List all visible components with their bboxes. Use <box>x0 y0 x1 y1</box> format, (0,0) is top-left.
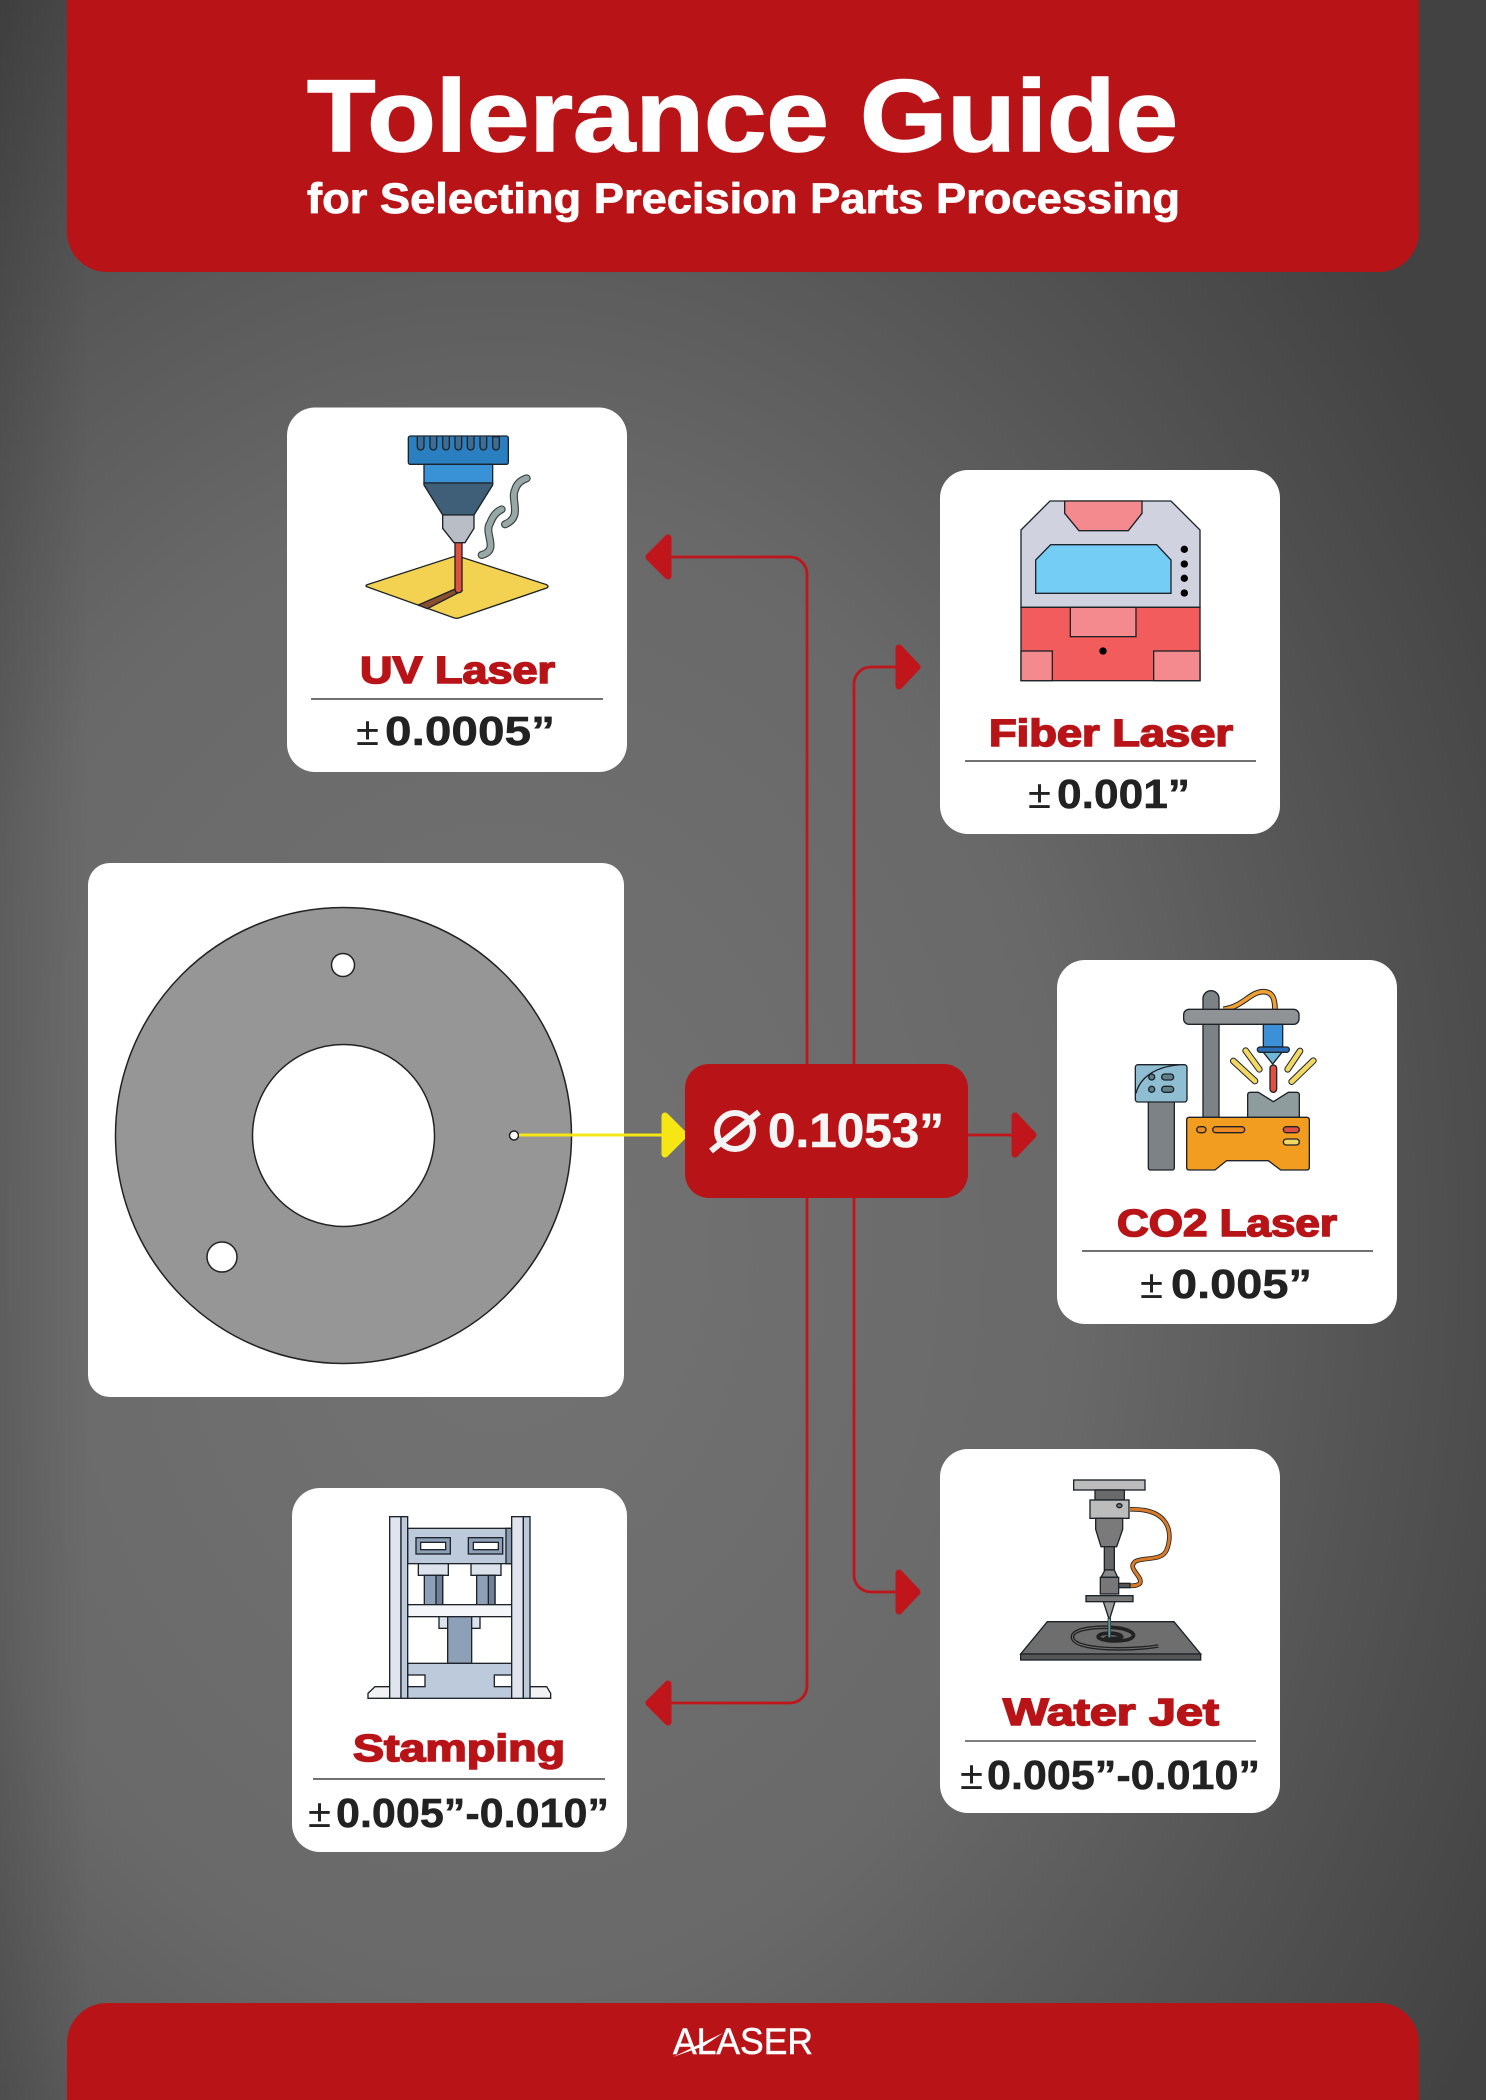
value: ±0.005": ± <box>1140 1263 1163 1307</box>
icon: water jet cutter <box>1021 1480 1201 1660</box>
connector: up to Fiber Laser <box>854 648 917 1064</box>
value: ±0.0005": 0.0005” <box>385 708 555 754</box>
value: ±0.0005": ± <box>356 710 379 754</box>
label: Fiber Laser: Fiber Laser <box>989 713 1233 755</box>
icon: fiber laser machine <box>1021 501 1200 681</box>
icon: diameter symbol <box>711 1112 759 1151</box>
logo: ALASER: ALASER <box>673 2021 813 2062</box>
footer banner <box>67 2003 1419 2100</box>
header banner <box>67 0 1419 272</box>
panel: Water Jet card <box>940 1449 1280 1813</box>
label: CO2 Laser: CO2 Laser <box>1117 1203 1337 1245</box>
dimension value: 0.1053” <box>768 1105 944 1158</box>
connector: down to Stamping <box>649 1198 807 1722</box>
panel: CO2 Laser card <box>1057 960 1397 1324</box>
icon: CO2 laser machine <box>1135 991 1313 1170</box>
icon: stamping press <box>368 1517 551 1698</box>
panel: Stamping card <box>292 1488 627 1852</box>
subtitle: for Selecting Precision Parts Processing <box>307 175 1180 223</box>
title: Tolerance Guide <box>307 59 1178 173</box>
connector: right to CO2 Laser <box>968 1116 1033 1154</box>
value: ±0.005"-0.010": ± <box>960 1754 983 1798</box>
label: UV Laser: UV Laser <box>360 650 555 692</box>
connector: down to Water Jet <box>854 1198 917 1611</box>
disc with holes <box>116 908 572 1364</box>
value: ±0.001": 0.001” <box>1057 771 1190 817</box>
panel: machined part <box>88 863 624 1397</box>
arrow: yellow pointer to dimension <box>519 1116 684 1154</box>
panel: UV Laser card <box>287 408 627 772</box>
value: ±0.005"-0.010": 0.005”-0.010” <box>336 1790 609 1836</box>
value: ±0.005"-0.010": 0.005”-0.010” <box>987 1752 1260 1798</box>
connector: up to UV Laser <box>649 538 807 1064</box>
callout: diameter dimension <box>685 1064 968 1198</box>
icon: UV laser head <box>366 436 548 618</box>
value: ±0.005"-0.010": ± <box>308 1792 331 1836</box>
label: Stamping: Stamping <box>353 1728 565 1770</box>
value: ±0.001": ± <box>1028 773 1051 817</box>
panel: Fiber Laser card <box>940 470 1280 834</box>
label: Water Jet: Water Jet <box>1003 1692 1219 1734</box>
value: ±0.005": 0.005” <box>1171 1261 1312 1307</box>
